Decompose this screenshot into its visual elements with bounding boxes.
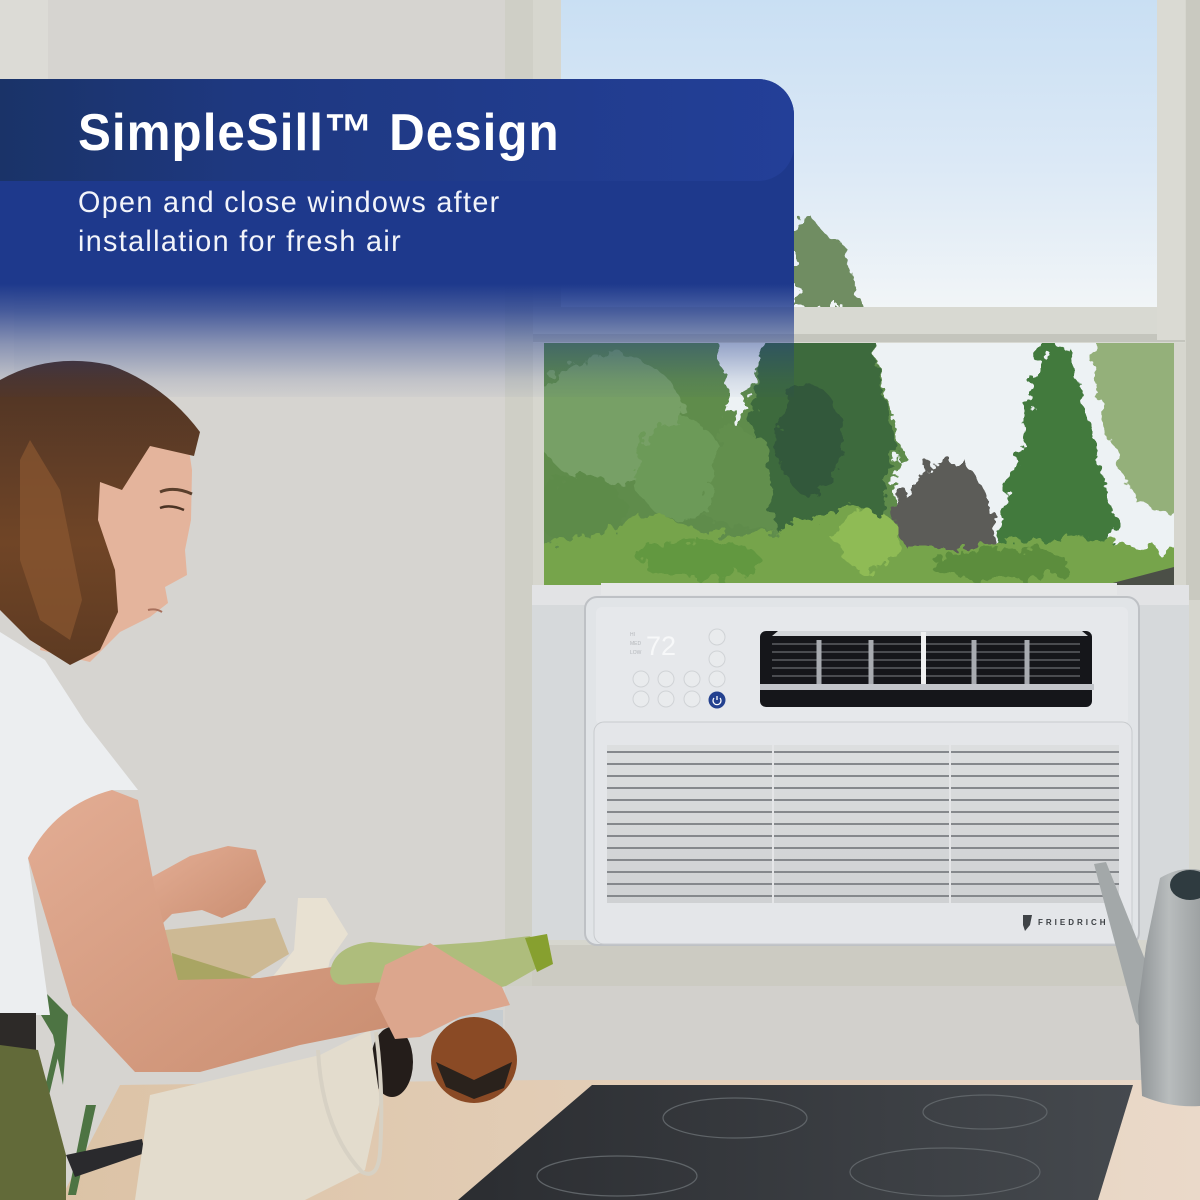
hair — [0, 361, 200, 665]
darker title tab — [0, 79, 794, 181]
sill — [532, 945, 1132, 986]
lower pane sky — [544, 343, 1174, 585]
countertop — [60, 1080, 1200, 1200]
vent — [760, 631, 1094, 707]
air conditioner body — [585, 597, 1139, 945]
subtitle: Open and close windows after — [78, 186, 501, 219]
dark round fruit — [371, 1027, 413, 1097]
far arm and hand — [150, 846, 266, 926]
near arm — [28, 790, 400, 1072]
cooktop — [458, 1085, 1133, 1200]
hand — [375, 943, 510, 1039]
front grille — [594, 722, 1132, 944]
phone on counter — [66, 1139, 145, 1177]
neck and face — [40, 430, 192, 662]
shirt — [0, 632, 138, 1015]
brand logo — [1023, 915, 1109, 931]
lower wall band — [505, 986, 1200, 1086]
control panel: 72 — [646, 631, 676, 661]
brand logo: FRIEDRICH — [1038, 918, 1109, 927]
sky upper pane — [561, 0, 1157, 307]
hair highlights — [20, 440, 82, 640]
subtitle: installation for fresh air — [78, 225, 402, 258]
plant leaves — [35, 985, 96, 1195]
meeting rail — [533, 0, 1185, 343]
title: SimpleSill™ Design — [78, 104, 560, 162]
groceries in bag — [165, 918, 289, 993]
round jar — [431, 1010, 517, 1103]
control panel: MED — [630, 641, 642, 647]
subtitle — [78, 186, 501, 258]
control panel: LOW — [630, 650, 642, 656]
window frame — [505, 0, 1200, 990]
control panel: HI — [630, 632, 635, 638]
zucchini — [330, 934, 553, 992]
belt and pants — [0, 1013, 66, 1200]
watering can — [1094, 862, 1200, 1106]
tote bag — [135, 898, 381, 1200]
trees — [544, 343, 1174, 585]
woman — [0, 361, 553, 1200]
air conditioner sleeve — [532, 583, 1189, 940]
upper tree tip — [795, 218, 863, 307]
control panel — [630, 629, 726, 708]
blue gradient banner — [0, 79, 794, 397]
